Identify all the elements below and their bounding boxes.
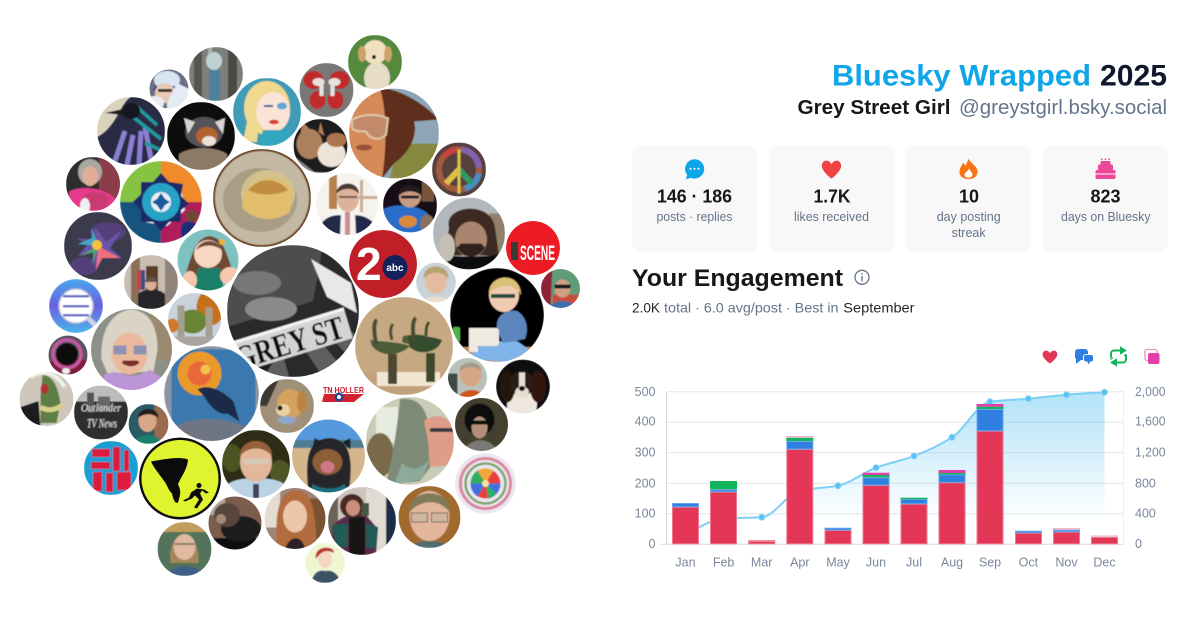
month axis labels: Feb (713, 556, 734, 570)
legend: chart series icons (1043, 348, 1160, 365)
month axis labels: Jun (866, 556, 886, 570)
avatar: woman in knit hat (150, 70, 188, 108)
panel: likes received stat: likes received (794, 210, 869, 224)
avatar: woman with wind-blown hair and sunglasses (349, 88, 439, 178)
month axis labels: Sep (979, 556, 1001, 570)
avatar: cartoon girl in green (177, 229, 240, 291)
panel: day posting streak stat: 10 (959, 185, 979, 206)
avatar: Outlander TV News logo: Outlander (81, 400, 121, 414)
avatar: black dog on beach (292, 419, 366, 494)
bars: replies (blue) (672, 410, 1080, 533)
icon: likes heart (1043, 351, 1057, 364)
chart: monthly engagement stacked bars with cumulative line (635, 385, 1166, 570)
text: engagement summary (632, 300, 915, 316)
left axis labels: 300 (635, 446, 656, 460)
avatar: woman with pink flowers (66, 157, 120, 211)
avatar: green bronze bird sculptures (355, 297, 453, 395)
text: engagement summary: total · 6.0 avg/post · Best in (664, 300, 838, 316)
subtitle: display name and handle (798, 97, 1167, 119)
right axis labels: 1,600 (1135, 414, 1166, 428)
panel: posts and replies stat: posts · replies (656, 210, 732, 224)
avatar: tornado warning sign (139, 438, 221, 520)
avatar: rainbow flower badge (455, 453, 516, 514)
panel: posts and replies stat (632, 145, 757, 252)
avatar: woman taking mirror selfie (328, 487, 396, 555)
avatar: young boy school photo (416, 262, 456, 302)
avatar: young woman with long red hair (264, 488, 326, 550)
bars: reposts (green) (710, 407, 1004, 499)
month axis labels: Mar (751, 556, 772, 570)
panel: days on Bluesky stat: days on Bluesky (1061, 210, 1151, 224)
avatar: woman with sunglasses small (540, 268, 580, 308)
avatar: Nashville Scene logo: SCENE (520, 242, 555, 265)
avatar: man with glasses and tie (222, 430, 290, 498)
avatar: blonde woman by water (158, 522, 212, 576)
right axis labels: 400 (1135, 506, 1156, 520)
avatar: tan dog with collar (260, 379, 314, 433)
right axis labels (1135, 385, 1166, 551)
avatar: red and white butterfly (300, 63, 354, 117)
panel: day posting streak stat: streak (952, 226, 986, 240)
icon: flame (960, 159, 978, 179)
month axis labels: Jul (906, 556, 922, 570)
avatar: WXYZ channel 2 abc logo: abc (386, 263, 404, 274)
avatar: green haired figure drawing (20, 372, 74, 426)
avatar: magnifier logo (49, 279, 103, 333)
subtitle: display name and handle: @greystgirl.bsky.social (959, 97, 1167, 119)
avatar: woman in blue shirt with cat (383, 178, 437, 232)
icon: reposts arrows (1110, 348, 1128, 365)
panel: posts and replies stat: 146 · 186 (657, 185, 732, 206)
left axis labels (635, 385, 656, 551)
avatar: Grey St street sign photo (217, 245, 359, 381)
title: Bluesky Wrapped 2025: 2025 (1100, 60, 1167, 92)
icon: replies bubbles (1075, 349, 1094, 364)
icon: heart (822, 161, 841, 179)
avatar: Nashville Scene logo (506, 221, 560, 275)
avatar: TN Holler logo (322, 385, 364, 402)
avatar: smiling woman with silver hair (90, 308, 172, 390)
left axis labels: 400 (635, 414, 656, 428)
month axis labels: Nov (1055, 556, 1078, 570)
month axis labels (675, 556, 1116, 570)
avatar: rainbow star quilt (120, 161, 202, 243)
month axis labels: Oct (1019, 556, 1039, 570)
avatar: cavalier spaniel (496, 360, 550, 420)
avatar: two kittens (294, 119, 348, 173)
avatar: cartoon red-haired woman (305, 543, 345, 583)
icon: birthday cake (1096, 158, 1116, 179)
left axis labels: 500 (635, 385, 656, 399)
right axis labels: 800 (1135, 476, 1156, 490)
cumulative points (759, 389, 1108, 520)
avatar: Outlander TV News logo: TV News (87, 416, 117, 430)
month axis labels: Jan (675, 556, 696, 570)
left axis labels: 0 (649, 537, 656, 551)
avatar: person with glasses and short hair (398, 486, 460, 548)
avatar: blonde cartoon with cat whiskers (233, 78, 301, 146)
avatar: WXYZ channel 2 abc logo (349, 230, 417, 298)
text: engagement summary: September (843, 300, 915, 316)
avatar: yorkie dog (208, 496, 262, 550)
icon: info (855, 270, 869, 284)
avatar: crow feather quilt (97, 97, 165, 165)
avatar: smiling man with glasses outdoors (448, 358, 488, 398)
avatar: rainbow peace sign quilt (432, 142, 486, 196)
avatar: black cat with colorful collar (48, 335, 88, 375)
right axis labels: 2,000 (1135, 385, 1166, 399)
avatar: school photo of boy in green (128, 404, 168, 444)
avatar: man in fur hat (433, 198, 505, 270)
avatar: woman with curly blue-grey hair (366, 397, 454, 485)
panel: days on Bluesky stat (1043, 145, 1168, 252)
heading: Your Engagement: Your Engagement (632, 265, 843, 292)
month axis labels: Dec (1093, 556, 1116, 570)
panel: avatar bubble cluster (20, 35, 580, 583)
left axis labels: 100 (635, 506, 656, 520)
panel: days on Bluesky stat: 823 (1090, 185, 1120, 206)
avatar: pinwheel star on galaxy (64, 212, 132, 280)
avatar: Grey St street sign photo: GREY ST (231, 310, 349, 377)
avatar: TN Holler logo: TN HOLLER (323, 385, 364, 395)
avatar: WXYZ channel 2 abc logo: 2 (356, 238, 382, 290)
cumulative line (686, 392, 1104, 534)
right axis labels: 0 (1135, 537, 1142, 551)
chart gridlines (660, 392, 1124, 544)
avatar: smiling man in navy suit (316, 173, 383, 235)
avatar: red strips on blue quilt (84, 441, 138, 495)
subtitle: display name and handle: Grey Street Girl (798, 97, 950, 119)
avatar: statue among trees (189, 47, 243, 101)
icon: quotes squares (1145, 350, 1160, 364)
panel: likes received stat: 1.7K (814, 185, 851, 206)
month axis labels: May (826, 556, 851, 570)
bars: quotes (pink) (862, 404, 1004, 475)
avatar: casserole on plate (213, 149, 311, 247)
icon: chat bubble (685, 159, 704, 179)
month axis labels: Aug (941, 556, 963, 570)
avatar: campus gate in autumn (168, 293, 221, 346)
bars: likes (red) (672, 431, 1118, 544)
panel: day posting streak stat (906, 145, 1031, 252)
avatar: dark-haired woman with sunglasses (454, 398, 508, 452)
text: engagement summary: 2.0K (632, 300, 661, 316)
left axis labels: 200 (635, 476, 656, 490)
right axis labels: 1,200 (1135, 446, 1166, 460)
avatar: cartoon woman at sewing machine (450, 268, 544, 362)
title: Bluesky Wrapped 2025: Bluesky Wrapped (832, 60, 1091, 92)
avatar: judge in robe (124, 255, 178, 309)
month axis labels: Apr (790, 556, 810, 570)
avatar: crow and sun quilt (164, 346, 259, 442)
cumulative area fill (686, 392, 1104, 544)
avatar: golden puppy on grass (348, 35, 402, 94)
avatar: Outlander TV News logo (74, 386, 128, 440)
panel: day posting streak stat: day posting (937, 210, 1001, 224)
panel: likes received stat (769, 145, 894, 252)
avatar: red panda (167, 102, 235, 170)
bars: thin light caps (748, 436, 1118, 542)
